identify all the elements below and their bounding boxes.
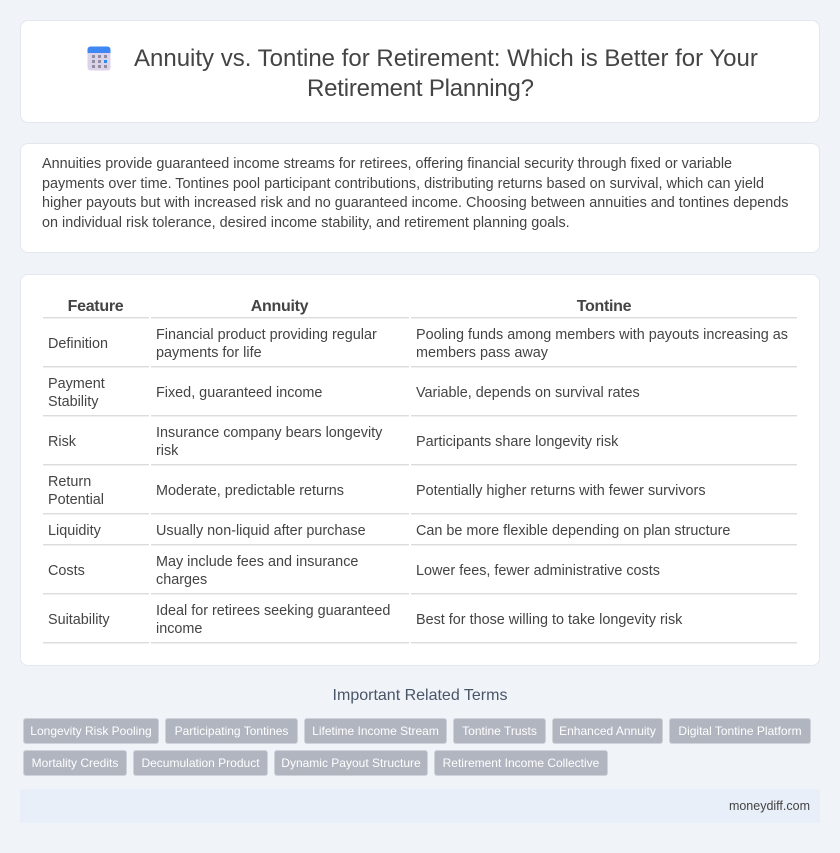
intro text: on individual risk tolerance, desired income stability, and retirement planning goals. (42, 215, 570, 231)
related terms tags: Longevity Risk Pooling (30, 724, 152, 738)
related terms tags: Tontine Trusts (462, 724, 537, 738)
row: Risk (48, 425, 618, 459)
row: Liquidity: Usually non-liquid after purchase (156, 523, 366, 539)
row: Payment Stability: Payment (48, 376, 105, 392)
row: Suitability: income (156, 621, 202, 637)
row: Costs: May include fees and insurance (156, 554, 358, 570)
row: Costs: charges (156, 572, 207, 588)
related terms tags: Dynamic Payout Structure (281, 756, 421, 770)
row: Suitability: Ideal for retirees seeking guaranteed (156, 603, 390, 619)
related terms tags: Lifetime Income Stream (312, 724, 439, 738)
row: Risk: Risk (48, 434, 76, 450)
row: Return Potential: Potentially higher returns with fewer survivors (416, 483, 706, 499)
row: Liquidity: Can be more flexible depending on plan structure (416, 523, 730, 539)
row: Risk: Participants share longevity risk (416, 434, 618, 450)
row: Suitability: Best for those willing to take longevity risk (416, 612, 682, 628)
intro text: higher payouts but with increased risk and no guaranteed income. Choosing between annuities and tontines depends (42, 195, 788, 211)
related terms tags (23, 718, 811, 776)
row: Risk: Insurance company bears longevity (156, 425, 382, 441)
table header: Annuity: Annuity (251, 298, 308, 315)
related terms tags: Digital Tontine Platform (678, 724, 802, 738)
row: Suitability: Suitability (48, 612, 110, 628)
title (134, 45, 758, 102)
row: Definition: members pass away (416, 345, 548, 361)
row: Definition: Definition (48, 336, 108, 352)
intro text: payments over time. Tontines pool participant contributions, distributing returns based on survival, which can yield (42, 176, 764, 192)
row: Definition (48, 327, 788, 361)
intro text (42, 156, 788, 231)
title: Annuity vs. Tontine for Retirement: Which is Better for Your (134, 45, 758, 72)
related terms tags: Retirement Income Collective (443, 756, 599, 770)
row: Risk: risk (156, 443, 178, 459)
row: Costs: Lower fees, fewer administrative costs (416, 563, 660, 579)
row: Costs: Costs (48, 563, 85, 579)
intro text: Annuities provide guaranteed income streams for retirees, offering financial security through fixed or variable (42, 156, 732, 172)
related terms tags: Enhanced Annuity (559, 724, 656, 738)
related terms tags: Participating Tontines (175, 724, 288, 738)
row: Payment Stability (48, 376, 640, 410)
row: Return Potential (48, 474, 706, 508)
row: Payment Stability: Stability (48, 394, 98, 410)
related terms heading: Important Related Terms (333, 687, 507, 704)
title: Retirement Planning? (307, 75, 534, 102)
row: Definition: Financial product providing regular (156, 327, 377, 343)
comparison table panel (20, 274, 820, 666)
table header: Feature: Feature (68, 298, 123, 315)
row: Return Potential: Return (48, 474, 91, 490)
header card (20, 20, 820, 123)
table header: Tontine: Tontine (577, 298, 631, 315)
row: Suitability (48, 603, 682, 637)
row: Costs (48, 554, 660, 588)
row: Return Potential: Potential (48, 492, 104, 508)
row: Payment Stability: Fixed, guaranteed income (156, 385, 322, 401)
row: Definition: payments for life (156, 345, 262, 361)
row: Liquidity: Liquidity (48, 523, 101, 539)
footer bar (20, 789, 820, 823)
footer brand: moneydiff.com (729, 799, 810, 813)
row: Definition: Pooling funds among members with payouts increasing as (416, 327, 788, 343)
row: Liquidity (48, 523, 730, 539)
intro card (20, 143, 820, 253)
related terms tags: Decumulation Product (141, 756, 260, 770)
related terms tags: Mortality Credits (32, 756, 118, 770)
row: Return Potential: Moderate, predictable returns (156, 483, 344, 499)
row: Payment Stability: Variable, depends on survival rates (416, 385, 640, 401)
icon: calendar (88, 46, 110, 70)
